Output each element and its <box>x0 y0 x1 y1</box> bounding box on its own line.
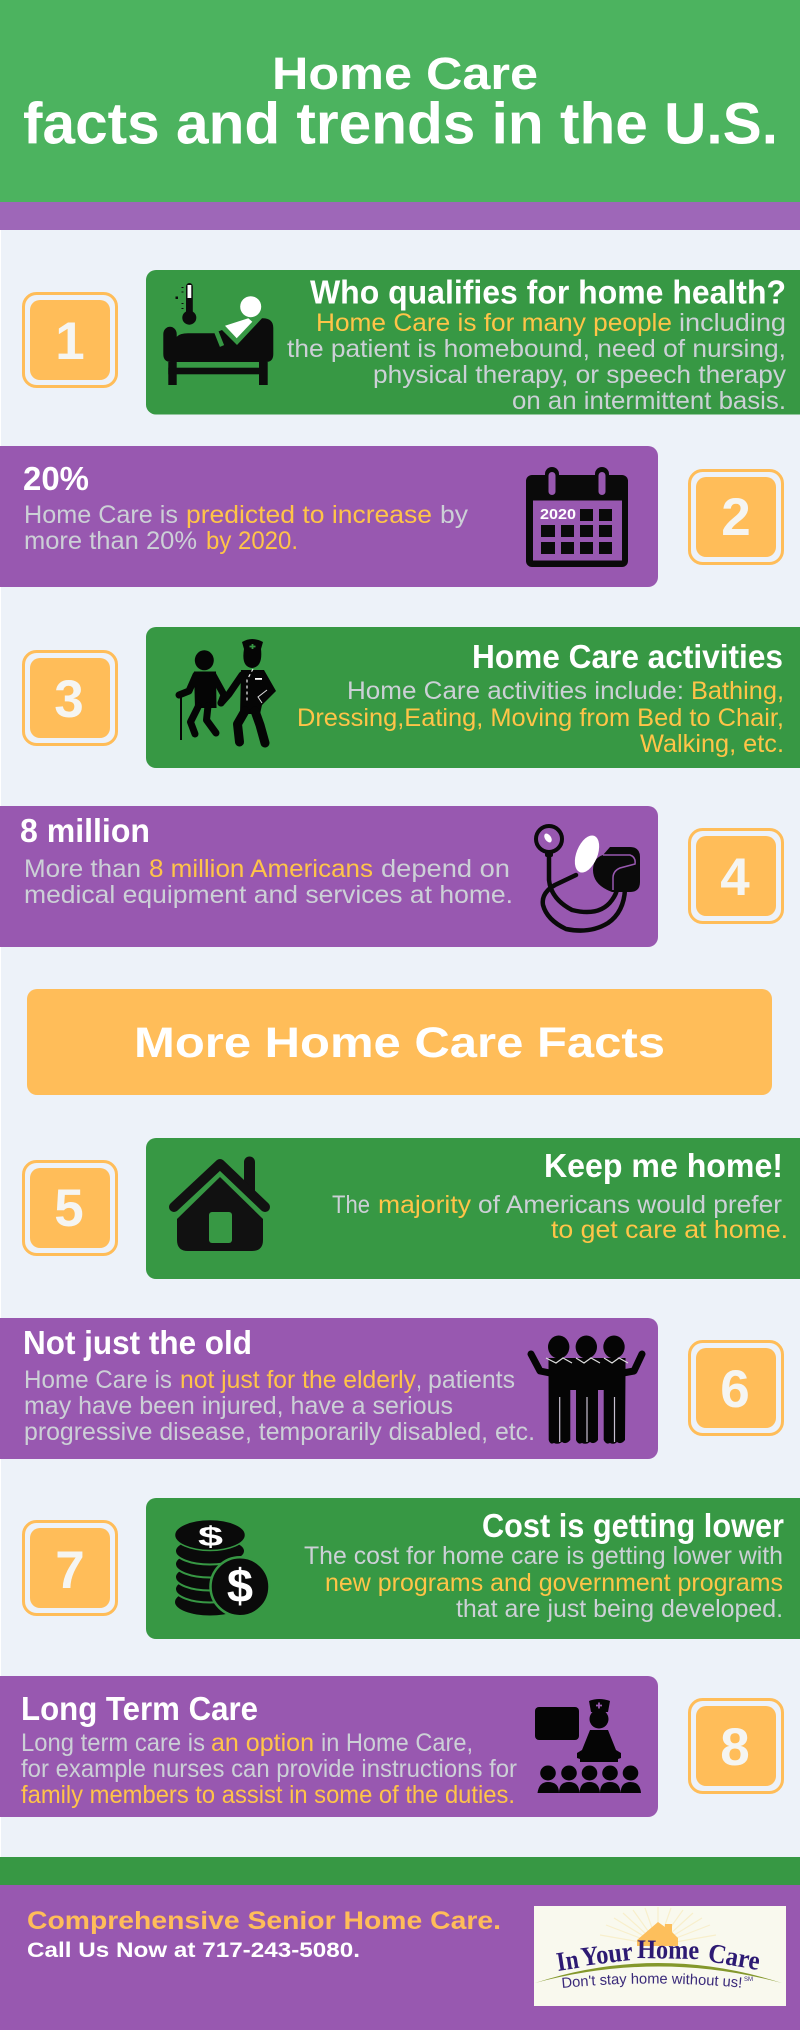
heading: Cost is getting lower <box>482 1507 784 1544</box>
body text: depend on <box>381 855 510 883</box>
icon: coin stack <box>174 1520 270 1616</box>
body text: The <box>332 1191 370 1219</box>
body text: Long term care is <box>21 1729 205 1757</box>
section banner: more home care facts <box>27 989 772 1095</box>
panel: long term care <box>0 1676 658 1817</box>
logo: In Your Home Care: Don't stay home without us! <box>562 1973 742 1988</box>
title line 1: Home Care <box>272 48 538 99</box>
body text: patients <box>428 1366 515 1394</box>
body text: , <box>416 1366 422 1394</box>
body text: may have been injured, have a serious <box>24 1392 453 1420</box>
heading: Who qualifies for home health? <box>310 274 786 310</box>
number badge 4 <box>690 830 782 922</box>
footer <box>0 1857 800 2030</box>
body text: Bathing, <box>691 677 784 705</box>
body text <box>332 1191 788 1244</box>
footer tagline: Comprehensive Senior Home Care. <box>27 1907 501 1935</box>
body text: predicted to increase <box>186 501 432 529</box>
number badge 8 <box>690 1700 782 1792</box>
body text: majority <box>378 1191 472 1219</box>
heading: 20% <box>23 460 89 497</box>
body text: medical equipment and services at home. <box>24 881 513 909</box>
number badge 2: 2 <box>721 488 751 547</box>
number badge 3 <box>24 652 116 744</box>
panel: 20% <box>0 446 658 587</box>
number badge 8: 8 <box>720 1718 750 1777</box>
icon: coin stack: $ <box>227 1559 253 1612</box>
panel: home care activities <box>146 627 800 768</box>
body text: the patient is homebound, need of nursing, <box>287 335 786 363</box>
title line 2: facts and trends in the U.S. <box>23 92 778 156</box>
body text <box>21 1729 517 1809</box>
number badge 1: 1 <box>55 312 85 371</box>
phone number: Call Us Now at 717-243-5080. <box>27 1939 360 1962</box>
body text: family members to assist in some of the duties. <box>21 1781 515 1809</box>
section banner: more home care facts: More Home Care Facts <box>134 1019 665 1067</box>
number badge 5: 5 <box>54 1179 84 1238</box>
body text: More than <box>24 855 141 883</box>
body text: not just for the elderly <box>180 1366 416 1394</box>
icon: calendar 2020 <box>526 467 628 567</box>
icon: coin stack: $ <box>198 1521 224 1552</box>
icon: elder and nurse walking <box>179 639 276 743</box>
body text: Walking, etc. <box>640 730 784 758</box>
body text: on an intermittent basis. <box>512 387 786 415</box>
panel: 8 million <box>0 806 658 947</box>
heading: Keep me home! <box>544 1147 783 1184</box>
icon: calendar 2020: 2020 <box>540 506 576 523</box>
body text <box>297 677 784 758</box>
icon: blood pressure monitor <box>536 826 640 931</box>
logo: In Your Home Care: In <box>554 1944 581 1977</box>
body text <box>24 1366 535 1446</box>
icon: patient in bed <box>163 283 273 385</box>
heading: Not just the old <box>23 1324 252 1361</box>
body text: Home Care is for many people <box>316 309 672 337</box>
number badge 3: 3 <box>54 670 84 729</box>
body text: to get care at home. <box>551 1216 788 1244</box>
body text <box>24 501 469 555</box>
body text: Home Care is <box>24 501 178 529</box>
panel: cost is getting lower <box>146 1498 800 1639</box>
heading: 8 million <box>20 812 150 849</box>
icon: three people with arms raised <box>531 1336 642 1444</box>
body text: The cost for home care is getting lower with <box>304 1542 783 1570</box>
body text: including <box>679 309 786 337</box>
body text: by <box>440 501 469 529</box>
heading: Home Care activities <box>472 638 783 675</box>
body text: for example nurses can provide instructions for <box>21 1755 517 1783</box>
body text: of Americans would prefer <box>478 1191 782 1219</box>
body text <box>24 855 513 909</box>
icon: house <box>174 1156 265 1251</box>
body text: Dressing,Eating, Moving from Bed to Chair, <box>297 704 784 732</box>
body text: by 2020. <box>206 527 298 555</box>
number badge 6: 6 <box>720 1360 750 1419</box>
body text: Home Care is <box>24 1366 172 1394</box>
body text: in Home Care, <box>321 1729 473 1757</box>
body text <box>304 1542 783 1623</box>
number badge 2 <box>690 470 782 564</box>
body text <box>287 309 787 415</box>
body text: physical therapy, or speech therapy <box>373 361 787 389</box>
body text: an option <box>211 1729 314 1757</box>
body text: 8 million Americans <box>149 855 373 883</box>
panel: keep me home <box>146 1138 800 1279</box>
body text: that are just being developed. <box>456 1595 783 1623</box>
number badge 6 <box>690 1342 782 1434</box>
number badge 5 <box>24 1162 116 1254</box>
logo: In Your Home Care: Your <box>579 1936 634 1972</box>
number badge 4: 4 <box>720 848 750 907</box>
logo: In Your Home Care <box>534 1906 786 2006</box>
body text: more than 20% <box>24 527 197 555</box>
number badge 7 <box>24 1522 116 1614</box>
number badge 1 <box>24 294 116 386</box>
body text: progressive disease, temporarily disabled, etc. <box>24 1418 535 1446</box>
logo: In Your Home Care: Care <box>706 1937 762 1976</box>
body text: Home Care activities include: <box>347 677 684 705</box>
header <box>0 0 800 230</box>
logo: In Your Home Care: SM <box>744 1977 753 1983</box>
body text: new programs and government programs <box>325 1569 783 1597</box>
icon: nurse teaching a group <box>535 1699 641 1793</box>
logo: In Your Home Care: Home <box>637 1934 699 1965</box>
panel: not just the old <box>0 1318 658 1459</box>
number badge 7: 7 <box>55 1541 85 1600</box>
heading: Long Term Care <box>21 1690 258 1727</box>
panel: who qualifies <box>146 270 800 415</box>
